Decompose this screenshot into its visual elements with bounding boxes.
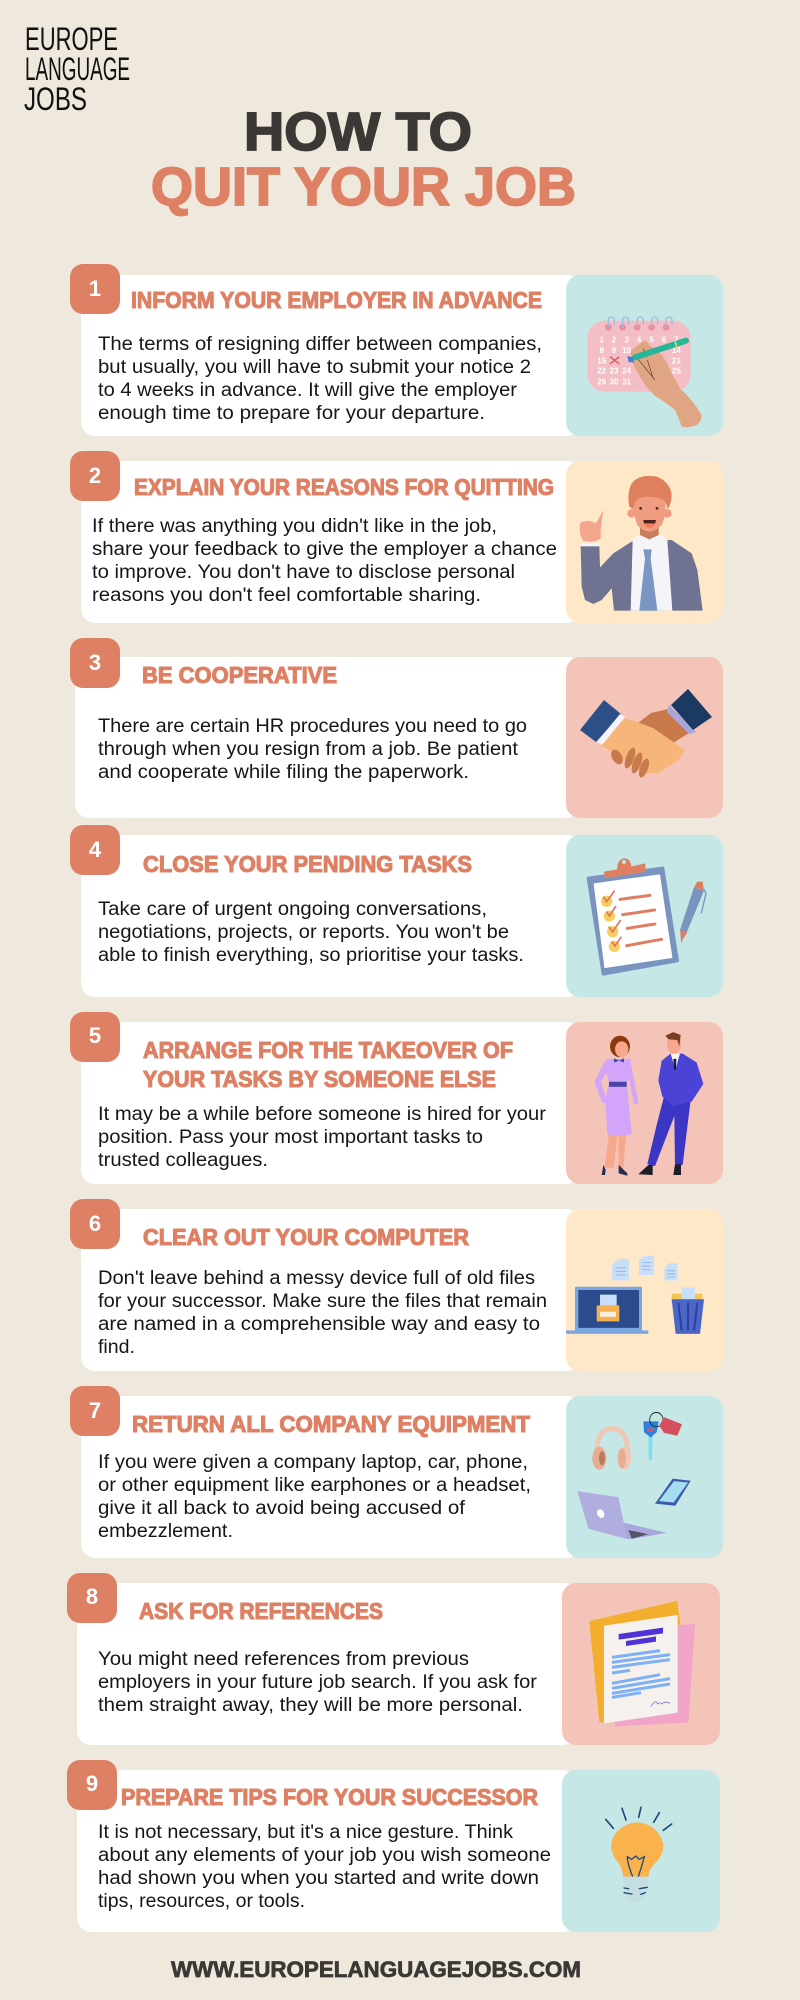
illustration panel: calendar: 7 — [674, 335, 679, 344]
body text: them straight away, they will be more personal. — [98, 1695, 523, 1716]
badge: number 7 — [70, 1386, 120, 1436]
heading: RETURN ALL COMPANY EQUIPMENT — [132, 1411, 530, 1437]
heading: CLEAR OUT YOUR COMPUTER — [143, 1224, 469, 1250]
heading: ARRANGE FOR THE TAKEOVER OF — [143, 1037, 513, 1063]
heading: BE COOPERATIVE — [142, 662, 337, 688]
title — [151, 102, 576, 217]
illustration panel: calendar: 25 — [672, 367, 681, 376]
badge: number 2: 2 — [89, 463, 101, 488]
body text: If you were given a company laptop, car, phone, — [98, 1452, 528, 1473]
body text: are named in a comprehensible way and easy to — [98, 1314, 540, 1335]
body text: It is not necessary, but it's a nice gesture. Think — [98, 1822, 514, 1843]
body text: enough time to prepare for your departure. — [98, 403, 485, 424]
body text: The terms of resigning differ between companies, — [98, 334, 542, 355]
illustration panel: calendar: 4 — [637, 335, 642, 344]
illustration panel: calendar: 21 — [672, 356, 681, 365]
body text: for your successor. Make sure the files that remain — [98, 1291, 547, 1312]
body text: to 4 weeks in advance. It will give the employer — [98, 380, 518, 401]
illustration panel: handshake — [566, 657, 723, 818]
body text: employers in your future job search. If you ask for — [98, 1672, 538, 1693]
illustration panel: calendar: 30 — [610, 377, 619, 386]
badge: number 4 — [70, 825, 120, 875]
badge: number 8 — [67, 1573, 117, 1623]
illustration panel: calendar: 29 — [597, 377, 607, 386]
illustration panel: calendar: 10 — [622, 346, 632, 355]
body text: about any elements of your job you wish someone — [98, 1845, 551, 1866]
body text — [98, 334, 542, 424]
body text: through when you resign from a job. Be patient — [98, 739, 519, 760]
body text: share your feedback to give the employer a chance — [92, 539, 557, 560]
badge: number 4: 4 — [89, 837, 102, 862]
badge: number 2 — [70, 451, 120, 501]
badge: number 6 — [70, 1199, 120, 1249]
illustration panel: laptop, files and bin — [566, 1209, 723, 1371]
badge: number 3: 3 — [89, 650, 101, 675]
heading: YOUR TASKS BY SOMEONE ELSE — [143, 1066, 496, 1092]
logo: Europe Language Jobs: LANGUAGE — [25, 51, 130, 87]
body text: It may be a while before someone is hired for your — [98, 1104, 547, 1125]
body text: reasons you don't feel comfortable sharing. — [92, 585, 481, 606]
badge: number 8: 8 — [86, 1584, 98, 1609]
body text: and cooperate while filing the paperwork. — [98, 762, 469, 783]
badge: number 9: 9 — [86, 1771, 98, 1796]
body text — [98, 716, 527, 783]
illustration panel: calendar: 9 — [612, 346, 617, 355]
illustration panel: man pointing up — [566, 461, 723, 623]
illustration panel: calendar: 3 — [624, 335, 629, 344]
heading: INFORM YOUR EMPLOYER IN ADVANCE — [131, 287, 542, 313]
body text: trusted colleagues. — [98, 1150, 268, 1171]
body text — [98, 1104, 547, 1171]
illustration panel: calendar: 15 — [597, 356, 607, 365]
illustration panel: calendar: 1 — [599, 335, 604, 344]
panel: step 1 — [70, 264, 723, 436]
badge: number 3 — [70, 638, 120, 688]
body text — [98, 1822, 551, 1912]
body text: find. — [98, 1337, 135, 1358]
heading: CLOSE YOUR PENDING TASKS — [143, 851, 472, 877]
badge: number 5: 5 — [89, 1023, 101, 1048]
illustration panel: headphones, keys, phone, laptop — [566, 1396, 723, 1558]
badge: number 1: 1 — [89, 276, 101, 301]
illustration panel: calendar: 23 — [610, 367, 619, 376]
panel: step 5 — [70, 1012, 723, 1184]
body text: Don't leave behind a messy device full of old files — [98, 1268, 535, 1289]
panel: step 9 — [67, 1760, 720, 1932]
panel: step 7 — [70, 1386, 723, 1558]
illustration panel: calendar: 2 — [612, 335, 617, 344]
body text — [98, 899, 524, 966]
body text: but usually, you will have to submit your notice 2 — [98, 357, 531, 378]
heading: ASK FOR REFERENCES — [139, 1598, 383, 1624]
badge: number 5 — [70, 1012, 120, 1062]
illustration panel: calendar: 8 — [599, 346, 604, 355]
illustration panel: calendar: 6 — [662, 335, 667, 344]
illustration panel: light bulb — [562, 1770, 720, 1932]
body text: negotiations, projects, or reports. You won't be — [98, 922, 509, 943]
body text: able to finish everything, so prioritise your tasks. — [98, 945, 524, 966]
title: HOW TO — [244, 102, 472, 162]
title: QUIT YOUR JOB — [151, 157, 576, 217]
panel: step 3 — [70, 638, 723, 818]
illustration panel: calendar: 22 — [597, 367, 607, 376]
body text: tips, resources, or tools. — [98, 1891, 305, 1912]
logo: Europe Language Jobs: EUROPE — [25, 21, 118, 57]
body text — [98, 1268, 547, 1358]
illustration panel: calendar: 31 — [622, 377, 632, 386]
badge: number 9 — [67, 1760, 117, 1810]
heading — [143, 1037, 513, 1092]
body text: had shown you when you started and write down — [98, 1868, 539, 1889]
heading: PREPARE TIPS FOR YOUR SUCCESSOR — [121, 1784, 538, 1810]
body text: to improve. You don't have to disclose personal — [92, 562, 515, 583]
logo: Europe Language Jobs — [24, 21, 130, 117]
illustration panel: clipboard checklist — [566, 835, 723, 997]
body text — [92, 516, 557, 606]
illustration panel: calendar: 14 — [672, 346, 681, 355]
badge: number 1 — [70, 264, 120, 314]
badge: number 6: 6 — [89, 1211, 101, 1236]
illustration panel: document with signature — [562, 1583, 720, 1745]
body text: There are certain HR procedures you need to go — [98, 716, 527, 737]
badge: number 7: 7 — [89, 1398, 101, 1423]
body text: embezzlement. — [98, 1521, 233, 1542]
heading: EXPLAIN YOUR REASONS FOR QUITTING — [134, 474, 554, 500]
body text — [98, 1649, 538, 1716]
panel: step 6 — [70, 1199, 723, 1371]
body text — [98, 1452, 531, 1542]
panel: step 2 — [70, 451, 723, 623]
illustration panel: two colleagues — [566, 1022, 723, 1184]
illustration panel: calendar: 24 — [622, 367, 632, 376]
body text: You might need references from previous — [98, 1649, 469, 1670]
footer: website: WWW.EUROPELANGUAGEJOBS.COM — [171, 1957, 581, 1982]
body text: Take care of urgent ongoing conversations, — [98, 899, 487, 920]
illustration panel: calendar: 5 — [649, 335, 654, 344]
body text: or other equipment like earphones or a headset, — [98, 1475, 531, 1496]
panel: step 8 — [67, 1573, 720, 1745]
panel: step 4 — [70, 825, 723, 997]
illustration panel: calendar — [566, 275, 723, 436]
logo: Europe Language Jobs: JOBS — [24, 81, 87, 117]
body text: If there was anything you didn't like in the job, — [92, 516, 497, 537]
body text: position. Pass your most important tasks to — [98, 1127, 483, 1148]
body text: give it all back to avoid being accused of — [98, 1498, 466, 1519]
